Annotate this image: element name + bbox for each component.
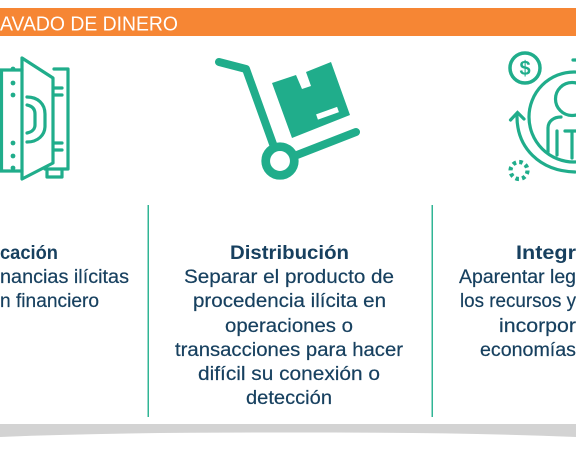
panel: colocacion: n financiero [0, 291, 99, 312]
panel: integracion: economías [480, 340, 576, 361]
divider: right [432, 205, 433, 417]
panel: integracion: Aparentar leg [459, 267, 576, 288]
panel: distribucion: transacciones para hacer [175, 340, 404, 361]
icon: safe [0, 58, 68, 179]
panel: integracion: incorpor [499, 316, 576, 337]
panel: colocacion [0, 242, 129, 312]
panel: colocacion: nancias ilícitas [0, 267, 129, 288]
icon: hand truck with box [219, 62, 356, 175]
panel: integracion: Integr [516, 242, 576, 264]
panel: distribucion: Distribución [230, 242, 349, 264]
panel: distribucion: operaciones o [225, 316, 353, 337]
header title: AVADO DE DINERO [0, 12, 178, 36]
panel: distribucion: difícil su conexión o [198, 364, 380, 385]
panel: distribucion [175, 242, 404, 409]
panel: distribucion: Separar el producto de [184, 267, 394, 288]
panel: integracion [459, 242, 576, 361]
panel: distribucion: detección [246, 388, 332, 409]
panel: distribucion: procedencia ilícita en [193, 291, 386, 312]
bottom grey band [0, 424, 576, 437]
header bar [0, 8, 576, 36]
panel: integracion: los recursos y [460, 291, 576, 312]
dollar sign: $ [519, 58, 531, 80]
divider: left [148, 205, 149, 417]
icon: integration person with money [510, 53, 576, 179]
panel: colocacion: cación [0, 242, 58, 264]
